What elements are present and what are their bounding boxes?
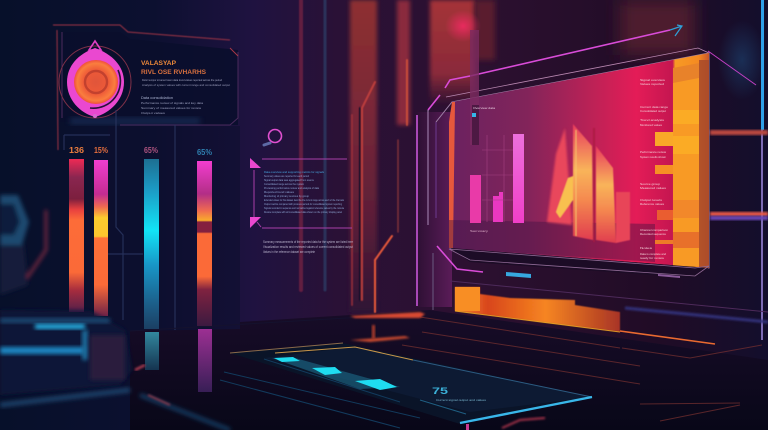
icon: small link (264, 143, 270, 145)
bottom corner accent (466, 418, 545, 430)
text block: callout body: Signal output data was aggregated from source (264, 178, 314, 182)
bar 3 reflection (145, 332, 159, 370)
illustration: glowing towers (547, 124, 630, 243)
text block: callout body: Processing performance review and analysis of data (264, 186, 319, 190)
text column: screen list (640, 78, 669, 260)
text block: callout body: Extended values for this dataset describe the current range across each of the channels (264, 198, 344, 202)
tablet caption: Current signal output and values (436, 398, 487, 402)
bar chart: vertical gradient bars (69, 146, 212, 392)
icon: triangle bottom (250, 217, 261, 228)
orange data strip (655, 60, 709, 268)
text column: screen list: Reference values (640, 202, 665, 206)
text block: callout body: Reported trend values (264, 190, 295, 194)
lower glowing stand (350, 281, 768, 421)
text block: callout body (264, 174, 344, 214)
text block: callout body: Monitoring of primary sources by group (264, 194, 309, 198)
text block: callout body: Signals recorded in sequence and normalized against reference values by the console (264, 206, 344, 210)
right side vertical light and reflections (708, 0, 768, 340)
text column: screen list: Measured values (640, 186, 667, 190)
icon: glowing gauge (59, 41, 131, 118)
text block: metrics details line 2: Summary of measured values for review (141, 106, 202, 110)
bar 2 (94, 160, 108, 316)
text column: screen list: Consolidated output (640, 109, 666, 113)
text column: screen list: Signal overview (640, 78, 666, 82)
vertical chart dividers (64, 110, 175, 330)
text column: screen list: Source group (640, 182, 661, 186)
bar label 1: 136 (69, 146, 85, 155)
text block: callout footnote: Summary measurements of the reported data for the system are listed here (263, 240, 353, 244)
neon frame around main screen (417, 25, 709, 310)
text block: callout body: Output metrics compared with previous periods for consolidated system reporting (264, 202, 342, 206)
text block: screen bottom label: Summary (470, 229, 489, 233)
panel: floor tablet (220, 343, 592, 428)
floor surface (130, 310, 768, 430)
text block: callout body: Summary values are reported for each period (264, 174, 309, 178)
bar 4 reflection (198, 329, 212, 392)
bar chart: screen pink bars (470, 134, 524, 223)
bar 3 (144, 159, 159, 329)
bar 1 (69, 159, 84, 312)
text column: screen list: Channel comparison (640, 228, 668, 232)
panel: main chart screen (449, 30, 709, 268)
text column: screen list: Data is complete and (640, 252, 666, 256)
text block: callout footnote: Visualization results and reviewed values of current consolidated output (263, 245, 353, 249)
text block: metrics summary line: Analysis of system values with current range and consolidated output (142, 83, 230, 87)
progress track (272, 358, 400, 389)
text block: callout body: Consolidated range across the system (264, 182, 305, 186)
icon: blurred hexagon device (0, 195, 46, 295)
icon: ring (268, 130, 282, 142)
text block: metrics summary: Dolor tempor sit amet lorem data trend values reported across the period (142, 78, 222, 82)
icon: triangle top (250, 158, 261, 168)
text column: screen list: Output levels (640, 198, 663, 202)
panel: metrics card (53, 25, 238, 150)
bar label 2: 15% (94, 146, 108, 155)
screen base (449, 248, 709, 278)
text block: screen top-left label: Overview data (473, 106, 495, 110)
cyan block 3 (355, 379, 397, 390)
cyan block 1 (274, 357, 300, 362)
text column: screen list: System results shown (640, 155, 666, 159)
heading: metrics card subtitle: RIVL OSE RVHARHS (141, 69, 207, 76)
wall conduit lines (301, 0, 407, 312)
text block: metrics details line: Performance review of signals and key data (141, 101, 203, 105)
text block: callout heading: Data overview and supporting metrics for signals (264, 170, 324, 174)
text block: metrics details: Data consolidation (141, 96, 173, 100)
indicator: cyan status bar (506, 272, 531, 278)
panel: floating text callout (250, 130, 353, 254)
text column: screen list: Performance review (640, 150, 667, 154)
text column: screen list: Current data range (640, 105, 669, 109)
bar label 4: 65% (197, 148, 212, 157)
text column: screen list: ready for review (640, 256, 665, 260)
callout bracket (254, 159, 352, 228)
text column: screen list: Notes (640, 246, 653, 250)
heading: metrics card title: VALASYAP (141, 60, 177, 67)
text block: callout body: Review complete with all consolidated data shown on the primary display panel (264, 210, 342, 214)
cyan block 2 (312, 367, 342, 375)
text column: screen list: Monitored values (640, 123, 663, 127)
bar label 3: 65% (144, 146, 158, 155)
text column: screen list: Values reported (640, 82, 665, 86)
text column: screen list: Recorded sequence (640, 232, 666, 236)
text block: metrics details line 3: Output values (141, 111, 166, 115)
blurred foreground console (0, 310, 230, 430)
bar 4 (197, 161, 212, 326)
text block: callout footnote (263, 240, 353, 254)
text column: screen list: Trend analysis (640, 118, 665, 122)
icon: screen cyan marker (472, 113, 476, 117)
tablet value: 75 (432, 386, 448, 396)
text block: callout footnote: Values in the reference dataset are complete (263, 250, 315, 254)
